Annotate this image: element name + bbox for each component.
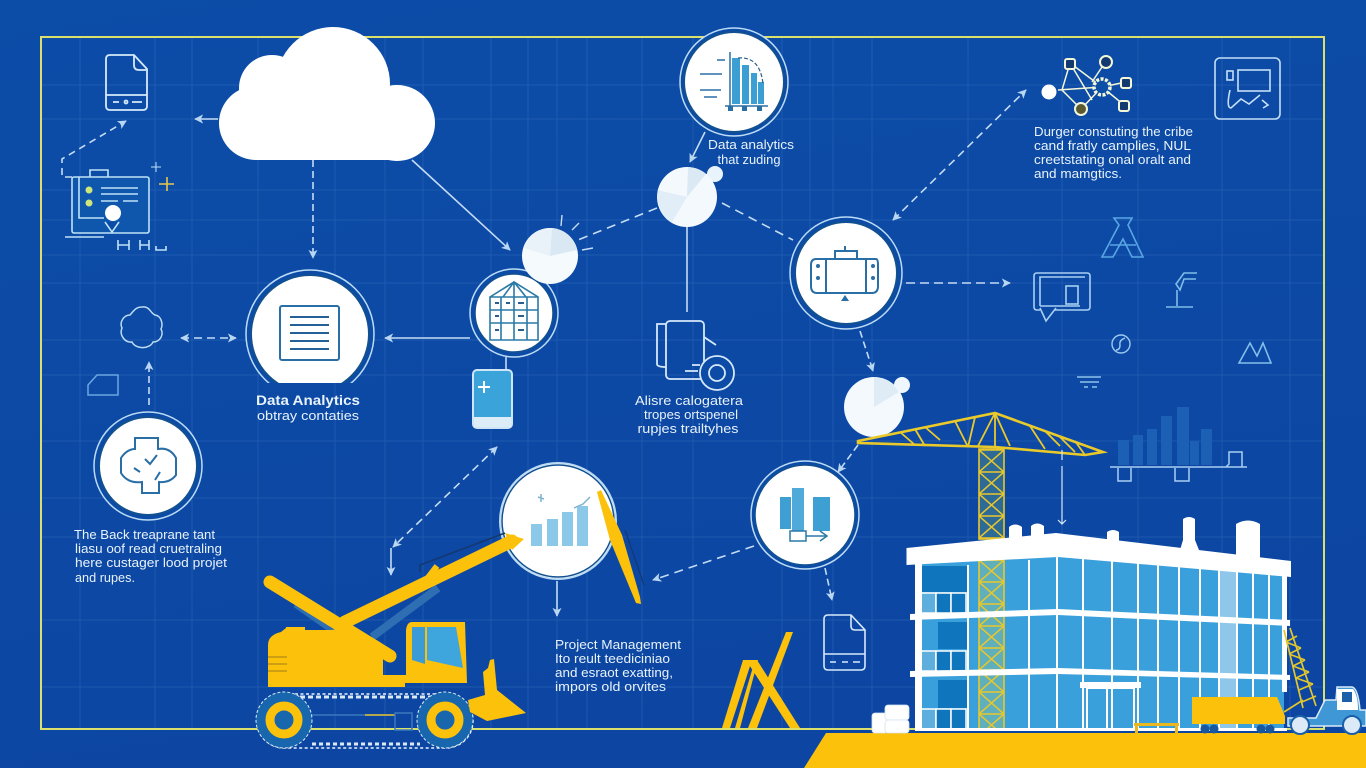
tower crane: [858, 413, 1103, 539]
text: back treaprane: and rupes.: [75, 571, 135, 585]
icon: lamp: [1166, 273, 1197, 307]
outer columns: [915, 562, 1287, 730]
chimneys: [1009, 517, 1260, 560]
text: data analytics top: [708, 138, 794, 167]
icon: tablet and disc: [657, 321, 734, 390]
icon: left wheel: [256, 692, 312, 748]
bench: [1134, 723, 1179, 733]
stick cable: [625, 530, 644, 585]
stick arm: [597, 490, 641, 604]
circle: blocks: [751, 461, 859, 569]
jib: [858, 413, 1103, 455]
excavator: [256, 490, 644, 748]
icon: monitor: [1034, 273, 1090, 321]
text: data analytics centre-left: [256, 393, 360, 423]
left window rows: [921, 593, 966, 729]
icon: document lower: [824, 615, 865, 670]
lower boom: [270, 582, 390, 656]
icon: right wheel: [417, 692, 473, 748]
icon: briefcase certificate: [65, 162, 174, 250]
circle: data analytics document: [246, 270, 374, 398]
icon: phone: [473, 370, 512, 428]
text: project management: impors old orvites: [555, 680, 666, 694]
mast lattice through glass: [979, 560, 1004, 730]
icon: cloud outline: [121, 307, 162, 348]
white and blue truck: [1288, 687, 1366, 734]
text: right description: [1034, 125, 1193, 181]
pie node left: [522, 228, 578, 284]
text: centre block: rupjes trailtyhes: [638, 422, 738, 436]
yellow ladder structure: [722, 632, 800, 728]
yellow ground: [804, 733, 1366, 768]
text: project management: and esraot exatting,: [555, 666, 673, 680]
text: data analytics top: Data analytics: [708, 138, 794, 152]
text: data analytics centre-left: obtray contaties: [257, 408, 360, 423]
mast through glass: [979, 560, 1004, 730]
door: [1087, 688, 1134, 729]
icon: network: [1042, 56, 1131, 115]
faded bar chart: [1110, 407, 1247, 481]
cab window front: [427, 627, 463, 668]
left dark window panels: [919, 566, 968, 708]
hook line: [1058, 450, 1066, 524]
text: project management: Project Management: [555, 638, 682, 652]
text: data analytics centre-left: Data Analytics: [256, 393, 360, 408]
circle: device: [790, 217, 902, 329]
icon: A-frame: [1102, 218, 1143, 257]
text: back treaprane: [74, 528, 228, 585]
pie node right: [844, 377, 910, 437]
icon: mountain: [1239, 343, 1271, 363]
barrels: [872, 705, 909, 733]
upper boom: [345, 541, 512, 622]
boom rod: [420, 566, 437, 588]
circle: rising bar chart: [500, 463, 616, 579]
mullions: [968, 555, 1269, 730]
text: right description: and mamgtics.: [1034, 167, 1122, 181]
ground slab: [915, 728, 1287, 731]
text: project management: [555, 638, 682, 694]
cab and body: [268, 622, 467, 687]
mast upper lattice: [979, 449, 1004, 539]
building: [906, 517, 1291, 731]
circle: clock cross: [94, 412, 202, 520]
pie node centre: [657, 166, 723, 227]
icon: document top: [106, 55, 147, 110]
icon: small list: [1077, 377, 1101, 387]
boom tension cable: [420, 533, 505, 572]
cab window back: [412, 627, 425, 664]
tracks: [257, 694, 473, 748]
text: right description: creetstating onal oralt and: [1034, 153, 1191, 167]
text: back treaprane: liasu oof read cruetraling: [75, 542, 222, 556]
text: project management: Ito reult teediciniao: [555, 652, 670, 666]
icon: clock: [1112, 335, 1130, 353]
roof: [906, 533, 1291, 577]
text: centre block: Alisre calogatera: [635, 394, 743, 408]
icon: framed chart: [1215, 58, 1280, 119]
text: right description: Durger constuting the cribe: [1034, 125, 1193, 139]
floor slab upper: [910, 609, 1290, 626]
text: centre block: [635, 394, 743, 436]
bucket: [468, 659, 526, 721]
text: centre block: tropes ortspenel: [644, 408, 738, 422]
door canopy: [1080, 682, 1141, 688]
hydraulic arm: [372, 588, 438, 637]
side lattice crane: [1284, 628, 1316, 712]
cylinder: [295, 605, 345, 640]
cloud: [219, 27, 435, 161]
mast upper: [979, 449, 1004, 539]
text: back treaprane: here custager lood projet: [75, 556, 228, 570]
floor slab lower: [910, 668, 1290, 680]
text: back treaprane: The Back treaprane tant: [74, 528, 216, 542]
circle: building calendar: [470, 269, 558, 357]
boom tip: [505, 533, 524, 550]
yellow truck: [1192, 697, 1285, 734]
connector arrows: [62, 90, 1026, 616]
light column: [1219, 570, 1237, 730]
glass: [919, 553, 1284, 730]
text: data analytics top: that zuding: [718, 153, 781, 167]
engine vents: [268, 657, 287, 671]
circle: top analytics: [680, 28, 788, 136]
text: right description: cand fratly camplies, NUL: [1034, 139, 1191, 153]
icon: folder: [88, 375, 118, 395]
